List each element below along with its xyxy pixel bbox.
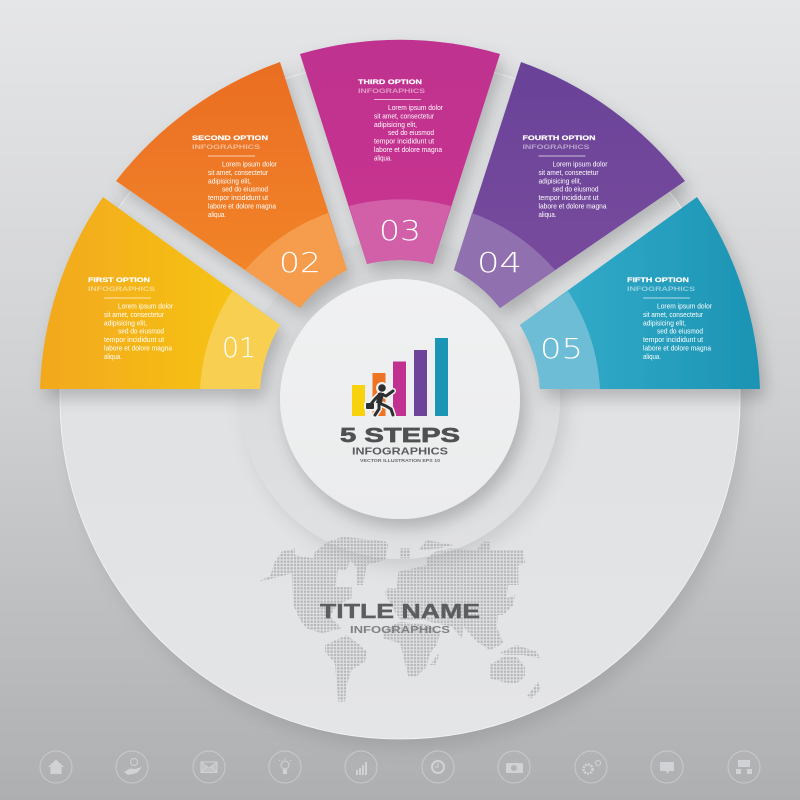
panel: second option: 02 bbox=[279, 246, 321, 279]
panel: first option: sed do eiusmod bbox=[118, 326, 164, 336]
panel: fifth option: labore et dolore magna bbox=[643, 344, 711, 352]
panel: second option: labore et dolore magna bbox=[208, 202, 276, 210]
panel: fifth option: 05 bbox=[540, 332, 583, 365]
panel: fourth option: adipisicing elit, bbox=[538, 176, 582, 186]
panel: third option bbox=[300, 40, 500, 264]
panel: third option: adipisicing elit, bbox=[374, 120, 417, 129]
panel: fourth option: FOURTH OPTION bbox=[522, 135, 596, 142]
panel: first option: adipisicing elit, bbox=[104, 318, 147, 328]
bar chart icon bbox=[352, 338, 448, 416]
panel: fifth option: FIFTH OPTION bbox=[627, 277, 690, 284]
panel: second option: sed do eiusmod bbox=[222, 184, 268, 194]
panel: second option bbox=[116, 62, 347, 308]
world map bbox=[260, 537, 540, 702]
panel: third option: 03 bbox=[379, 214, 421, 247]
panel: fifth option: INFOGRAPHICS bbox=[627, 286, 696, 293]
icon: gears bbox=[575, 751, 607, 783]
panel: second option: INFOGRAPHICS bbox=[192, 144, 261, 151]
heading: 5 steps: VECTOR ILLUSTRATION EPS 10 bbox=[360, 458, 441, 463]
panel: first option: tempor incididunt ut bbox=[104, 335, 164, 344]
icon: camera bbox=[498, 751, 530, 783]
panel: third option: sed do eiusmod bbox=[388, 128, 434, 137]
panel: fifth option: adipisicing elit, bbox=[643, 318, 686, 328]
panel: fifth option bbox=[520, 197, 760, 389]
heading: title name bbox=[320, 601, 480, 636]
panel: first option: aliqua. bbox=[104, 352, 122, 361]
icon: clock bbox=[422, 751, 454, 783]
panel: fourth option: Lorem ipsum dolor bbox=[552, 160, 608, 168]
icon: home bbox=[40, 751, 72, 783]
panel: third option: sit amet, consectetur bbox=[374, 112, 435, 120]
panel: second option: SECOND OPTION bbox=[192, 135, 269, 142]
panel: fourth option bbox=[454, 62, 685, 308]
icon: light bulb bbox=[269, 751, 301, 783]
panel: first option: 01 bbox=[222, 331, 256, 364]
icon: growth chart bbox=[345, 751, 377, 783]
panel: fourth option: aliqua. bbox=[538, 210, 556, 219]
heading: 5 steps: 5 STEPS bbox=[340, 425, 460, 447]
panel: first option: INFOGRAPHICS bbox=[88, 286, 156, 293]
panel: fourth option: sed do eiusmod bbox=[552, 184, 598, 194]
heading: title name: TITLE NAME bbox=[320, 601, 480, 623]
panel: first option: labore et dolore magna bbox=[104, 344, 172, 352]
center circle bbox=[280, 279, 520, 519]
panel: second option: tempor incididunt ut bbox=[208, 193, 268, 202]
panel: second option: adipisicing elit, bbox=[208, 176, 251, 186]
panel: first option: Lorem ipsum dolor bbox=[118, 302, 174, 310]
panel: third option: INFOGRAPHICS bbox=[358, 88, 426, 95]
panel: fourth option: tempor incididunt ut bbox=[538, 193, 598, 202]
inner ring bbox=[240, 239, 560, 559]
panel: fifth option: Lorem ipsum dolor bbox=[657, 302, 713, 310]
icon: network bbox=[728, 751, 760, 783]
panel: third option: THIRD OPTION bbox=[358, 79, 423, 86]
icon: speech bubble bbox=[651, 751, 683, 783]
panel: first option bbox=[40, 197, 280, 389]
panel: first option: FIRST OPTION bbox=[88, 277, 151, 284]
panel: third option: Lorem ipsum dolor bbox=[388, 103, 444, 112]
panel: third option: labore et dolore magna bbox=[374, 145, 442, 154]
panel: third option: aliqua. bbox=[374, 154, 392, 162]
panel: fifth option: aliqua. bbox=[643, 352, 661, 361]
panel: first option: sit amet, consectetur bbox=[104, 310, 165, 319]
panel: fourth option: labore et dolore magna bbox=[538, 202, 607, 210]
panel: fifth option: tempor incididunt ut bbox=[643, 335, 703, 344]
panel: second option: aliqua. bbox=[208, 210, 226, 219]
panel: fourth option: INFOGRAPHICS bbox=[522, 144, 591, 151]
panel: second option: Lorem ipsum dolor bbox=[222, 160, 278, 168]
icon: running businessman bbox=[366, 384, 393, 415]
heading: 5 steps bbox=[340, 425, 460, 463]
panel: second option: sit amet, consectetur bbox=[208, 168, 269, 177]
panel: third option: tempor incididunt ut bbox=[374, 136, 434, 146]
heading: title name: INFOGRAPHICS bbox=[350, 624, 450, 636]
base disc bbox=[60, 59, 740, 739]
icon: hand with coin bbox=[116, 751, 148, 783]
heading: 5 steps: INFOGRAPHICS bbox=[352, 446, 448, 458]
icon: envelope bbox=[193, 751, 225, 783]
panel: fifth option: sed do eiusmod bbox=[657, 326, 703, 336]
panel: fourth option: 04 bbox=[477, 246, 522, 279]
panel: fifth option: sit amet, consectetur bbox=[643, 310, 704, 319]
panel: fourth option: sit amet, consectetur bbox=[538, 168, 599, 177]
